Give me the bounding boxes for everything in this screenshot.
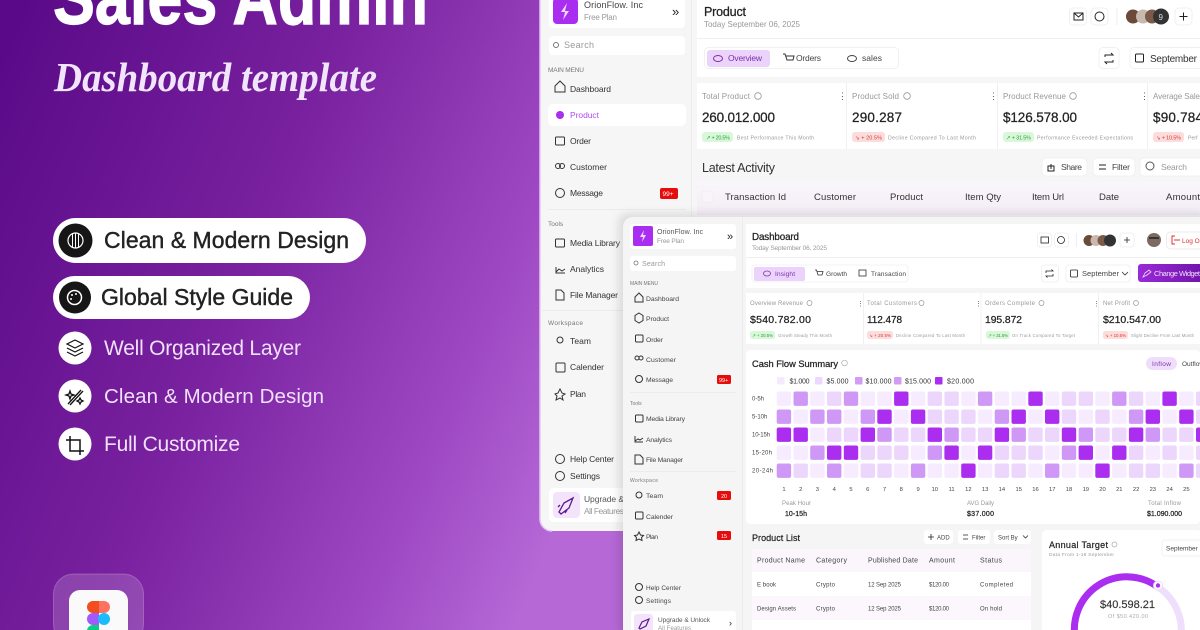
summary: peak hour bbox=[782, 501, 811, 518]
heatmap column labels: 18 bbox=[1066, 487, 1072, 493]
front sidebar menu: MAIN MENU bbox=[630, 281, 658, 287]
tabs: Growth bbox=[826, 271, 847, 278]
stat: orders complete: ⋮ bbox=[1093, 301, 1100, 308]
stat: average sale: Perf bbox=[1188, 136, 1198, 142]
heatmap row labels bbox=[752, 396, 773, 474]
sidebar menu: Tools bbox=[548, 221, 564, 228]
header actions bbox=[1038, 233, 1161, 247]
front sidebar menu: Help Center bbox=[646, 585, 682, 592]
stat: average sale bbox=[1153, 92, 1200, 142]
feature: full customize bbox=[58, 428, 240, 460]
dashboard header card: Today September 06, 2025 bbox=[752, 245, 827, 252]
stat: average sale: Average Sale bbox=[1153, 92, 1200, 101]
sidebar brand card: OrionFlow. Inc bbox=[584, 0, 644, 10]
front sidebar menu: Message bbox=[646, 377, 673, 384]
list table: Status bbox=[980, 558, 1002, 564]
stat: total product bbox=[702, 91, 847, 142]
stat: orders complete bbox=[985, 300, 1100, 339]
heatmap row labels: 20-24h bbox=[752, 468, 773, 474]
sidebar search: Search bbox=[564, 40, 594, 50]
stat: total customers: ⋮ bbox=[975, 301, 982, 308]
stat: net profit: ↘ + 10.5% bbox=[1105, 333, 1126, 338]
activity table header bbox=[697, 182, 1200, 215]
sidebar menu: Product bbox=[570, 110, 600, 120]
heatmap column labels: 17 bbox=[1049, 487, 1055, 493]
header actions bbox=[1070, 8, 1192, 25]
stat cards row (back) bbox=[697, 83, 1200, 149]
sidebar menu: Analytics bbox=[570, 264, 604, 274]
heatmap legend: $20.000 bbox=[947, 378, 974, 386]
stat: orders complete: On Track Compared To Target bbox=[1012, 333, 1076, 338]
heatmap column labels: 21 bbox=[1116, 487, 1123, 493]
tabs bbox=[752, 265, 908, 282]
stat: net profit: Net Profit bbox=[1103, 301, 1130, 307]
front sidebar menu: Calender bbox=[646, 514, 674, 521]
stat: orders complete: ↗ + 31.5% bbox=[988, 333, 1008, 338]
summary: peak hour: 10-15h bbox=[785, 511, 807, 518]
front sidebar menu bbox=[630, 281, 736, 605]
heatmap column labels: 5 bbox=[849, 487, 853, 493]
list table: 12 Sep 2025 bbox=[868, 606, 902, 612]
feature: well organized layer bbox=[58, 332, 301, 364]
sidebar brand card bbox=[549, 0, 685, 28]
stat: product revenue: Performance Exceeded Expectations bbox=[1037, 136, 1133, 142]
tabs: sales bbox=[862, 53, 882, 63]
activity table header: Date bbox=[1099, 192, 1119, 203]
sidebar menu: Media Library bbox=[570, 238, 621, 248]
inflow / outflow toggle bbox=[1146, 357, 1200, 370]
header actions: 9 bbox=[1158, 13, 1164, 22]
feature pill: clean and modern design: Clean & Modern Design bbox=[104, 227, 349, 253]
sidebar menu: 99+ bbox=[662, 191, 674, 198]
heatmap column labels: 25 bbox=[1183, 487, 1190, 493]
heatmap column labels: 14 bbox=[999, 487, 1006, 493]
sidebar menu: Message bbox=[570, 188, 603, 198]
heatmap column labels: 20 bbox=[1099, 487, 1106, 493]
sidebar menu: Help Center bbox=[570, 454, 614, 464]
month button bbox=[1130, 48, 1200, 68]
icon: palette bbox=[59, 282, 91, 314]
stat: product revenue bbox=[1003, 91, 1149, 142]
icon: figma logo bbox=[87, 601, 110, 630]
heatmap column labels: 16 bbox=[1032, 487, 1039, 493]
product header card: Product bbox=[704, 5, 747, 19]
dashboard header card bbox=[746, 224, 1200, 288]
month selector bbox=[1162, 540, 1200, 556]
month selector bbox=[1066, 265, 1130, 282]
heatmap column labels bbox=[782, 487, 1190, 493]
list table: Completed bbox=[980, 582, 1013, 588]
stat: orders complete: 195.872 bbox=[985, 315, 1022, 326]
panel: product list bbox=[746, 530, 1036, 630]
sidebar menu: Settings bbox=[570, 471, 600, 481]
log out button bbox=[1166, 232, 1200, 249]
heatmap column labels: 23 bbox=[1150, 487, 1156, 493]
gauge value: $40.598.21 bbox=[1100, 599, 1155, 611]
month selector: September bbox=[1082, 269, 1120, 278]
sidebar menu: Order bbox=[570, 136, 591, 146]
front sidebar menu: Order bbox=[646, 337, 664, 344]
heatmap column labels: 3 bbox=[816, 487, 819, 493]
stat: product revenue: ↗ + 31.5% bbox=[1006, 136, 1031, 142]
list table: Category bbox=[816, 558, 848, 564]
heatmap column labels: 10 bbox=[932, 487, 938, 493]
month button: September bbox=[1150, 54, 1198, 65]
heatmap column labels: 4 bbox=[833, 487, 837, 493]
change widget button: Change Widget bbox=[1154, 269, 1200, 278]
summary: avg daily: AVG Daily bbox=[967, 501, 994, 507]
stat: net profit: $210.547.00 bbox=[1103, 314, 1161, 326]
heatmap column labels: 12 bbox=[965, 487, 972, 493]
panel: product list: Product List bbox=[752, 533, 800, 543]
heatmap column labels: 22 bbox=[1133, 487, 1139, 493]
stat cards row (front) bbox=[746, 293, 1200, 344]
feature: clean and modern design bbox=[58, 380, 324, 412]
front sidebar menu: Team bbox=[646, 493, 663, 500]
stat: overview revenue: ↗ + 20.5% bbox=[752, 333, 773, 338]
heatmap column labels: 13 bbox=[982, 487, 988, 493]
table tools: Filter bbox=[1112, 162, 1130, 172]
sidebar menu: Workspace bbox=[548, 320, 583, 327]
change widget button bbox=[1138, 264, 1200, 282]
front upgrade card: Upgrade & Unlock bbox=[658, 617, 711, 624]
feature pill: clean and modern design bbox=[53, 218, 366, 263]
icon: crop bbox=[66, 436, 84, 455]
month selector: September bbox=[1166, 546, 1199, 552]
front sidebar brand: » bbox=[727, 231, 733, 243]
heatmap column labels: 19 bbox=[1083, 487, 1089, 493]
front sidebar brand: OrionFlow. Inc bbox=[657, 229, 704, 236]
list table: $120.00 bbox=[929, 606, 950, 612]
stat: total customers: Decline Compared To Last Month bbox=[896, 333, 966, 338]
stat: orders complete: Orders Complete bbox=[985, 301, 1036, 307]
feature: full customize: Full Customize bbox=[104, 433, 240, 456]
activity table header: Item Url bbox=[1032, 192, 1064, 203]
front sidebar menu: Customer bbox=[646, 357, 677, 364]
stat: product sold: Product Sold bbox=[852, 92, 899, 101]
product header card bbox=[697, 0, 1200, 77]
stat: total customers: 112.478 bbox=[867, 315, 902, 326]
list table: $120.00 bbox=[929, 582, 950, 588]
sidebar menu: Calender bbox=[570, 362, 604, 372]
list table: 12 Sep 2025 bbox=[868, 582, 902, 588]
heatmap column labels: 2 bbox=[799, 487, 802, 493]
stat: total customers bbox=[867, 300, 982, 339]
front sidebar menu: Product bbox=[646, 316, 669, 323]
gauge caption: Of $50.420.00 bbox=[1108, 614, 1148, 620]
front sidebar menu: Plan bbox=[646, 534, 658, 541]
sync button bbox=[1042, 265, 1058, 282]
table tools bbox=[1042, 158, 1200, 176]
heatmap row labels: 5-10h bbox=[752, 414, 767, 420]
stat: product sold: Decline Compared To Last Month bbox=[888, 136, 976, 142]
list actions: ADD bbox=[937, 536, 950, 542]
front sidebar brand bbox=[630, 224, 736, 249]
front sidebar brand: Free Plan bbox=[657, 238, 684, 245]
sidebar menu: Dashboard bbox=[570, 84, 611, 94]
front sidebar menu: 99+ bbox=[719, 378, 728, 384]
activity table header: Product bbox=[890, 192, 923, 203]
list table: Product Name bbox=[757, 558, 805, 564]
list table: Published Date bbox=[868, 558, 918, 564]
table tools: Share bbox=[1061, 162, 1082, 172]
sidebar menu: MAIN MENU bbox=[548, 67, 584, 74]
stat: overview revenue: ⋮ bbox=[857, 301, 864, 308]
sidebar upgrade card: Upgrade & bbox=[584, 494, 624, 504]
stat: total product: ⋮ bbox=[838, 91, 847, 101]
feature: well organized layer: Well Organized Layer bbox=[104, 337, 301, 360]
stat: product sold bbox=[852, 91, 998, 142]
summary: avg daily: $37.000 bbox=[967, 511, 994, 518]
heatmap legend: $10.000 bbox=[866, 378, 892, 386]
list actions bbox=[924, 530, 1031, 544]
stat: overview revenue bbox=[750, 300, 864, 339]
heatmap legend: $5.000 bbox=[826, 378, 849, 386]
stat: product revenue: $126.578.00 bbox=[1003, 110, 1077, 125]
summary: avg daily bbox=[967, 501, 994, 518]
table tools: Search bbox=[1161, 162, 1187, 172]
activity table header: Transaction Id bbox=[725, 192, 786, 203]
icon: contrast circle bbox=[58, 224, 92, 258]
stat: overview revenue: $540.782.00 bbox=[750, 314, 811, 326]
stat: total product: Total Product bbox=[702, 92, 751, 101]
stat: net profit: Slight Decline From Last Month bbox=[1131, 333, 1195, 338]
heatmap column labels: 1 bbox=[782, 487, 786, 493]
stat: total customers: ↘ + 20.5% bbox=[869, 333, 891, 338]
summary: total inflow: $1.090.000 bbox=[1147, 511, 1182, 518]
summary: total inflow: Total Inflow bbox=[1148, 501, 1182, 507]
subtitle: Dashboard template bbox=[53, 54, 377, 100]
icon: layers bbox=[67, 340, 83, 356]
sidebar menu: Team bbox=[570, 336, 591, 346]
front upgrade card bbox=[631, 611, 736, 630]
summary: total inflow bbox=[1147, 501, 1182, 518]
figma badge bbox=[54, 574, 144, 630]
list table: Amount bbox=[929, 558, 955, 564]
front sidebar menu: Settings bbox=[646, 598, 672, 605]
stat: net profit bbox=[1103, 300, 1195, 339]
list actions: Sort By bbox=[998, 536, 1018, 542]
stat: total customers: Total Customers bbox=[867, 301, 917, 307]
stat: product sold: ⋮ bbox=[989, 91, 998, 101]
summary: peak hour: Peak Hour bbox=[782, 501, 811, 507]
icon: magic wand bbox=[66, 390, 83, 405]
heatmap column labels: 9 bbox=[916, 487, 920, 493]
feature pill: global style guide: Global Style Guide bbox=[101, 284, 293, 310]
front sidebar menu: Workspace bbox=[630, 478, 658, 484]
stat: total product: ↗ + 20.5% bbox=[706, 136, 730, 142]
tabs: Insight bbox=[775, 271, 795, 278]
list actions: Filter bbox=[972, 536, 985, 542]
sidebar menu: Plan bbox=[570, 389, 586, 399]
gauge bbox=[1074, 577, 1181, 630]
tabs: Overview bbox=[728, 53, 763, 63]
panel: product dashboard (back) bbox=[540, 0, 1200, 531]
front sidebar menu: Analytics bbox=[646, 437, 673, 444]
front sidebar menu: File Manager bbox=[646, 457, 684, 464]
front sidebar search bbox=[630, 256, 736, 271]
front sidebar menu: 15 bbox=[721, 534, 727, 540]
list table: E book bbox=[757, 582, 777, 588]
panel: annual target bbox=[1042, 530, 1200, 630]
stat: overview revenue: Overview Revenue bbox=[750, 301, 804, 307]
product header card: Today September 06, 2025 bbox=[704, 20, 801, 29]
dashboard header card: Dashboard bbox=[752, 232, 799, 243]
feature: clean and modern design: Clean & Modern Design bbox=[104, 385, 324, 408]
tabs: Orders bbox=[796, 53, 821, 63]
stat: product sold: 290.287 bbox=[852, 110, 902, 125]
inflow / outflow toggle: Inflow bbox=[1152, 361, 1171, 368]
heatmap column labels: 7 bbox=[883, 487, 886, 493]
sidebar upgrade card: All Features bbox=[584, 506, 624, 516]
front sidebar menu: Tools bbox=[630, 401, 642, 407]
sidebar menu bbox=[540, 67, 690, 481]
heatmap column labels: 24 bbox=[1166, 487, 1174, 493]
sync button bbox=[1099, 48, 1119, 68]
heatmap row labels: 0-5h bbox=[752, 396, 764, 402]
heatmap column labels: 8 bbox=[900, 487, 903, 493]
panel: cash flow summary: Cash Flow Summary bbox=[752, 359, 838, 369]
feature pill: global style guide bbox=[53, 276, 310, 319]
front sidebar search: Search bbox=[642, 261, 665, 268]
stat: overview revenue: Growth Steady This Month bbox=[778, 333, 833, 338]
heatmap grid bbox=[777, 392, 1200, 478]
activity table header: Amount bbox=[1166, 192, 1200, 203]
shadow under front panel bbox=[618, 213, 1200, 630]
sidebar search bbox=[549, 36, 685, 55]
list table: Design Assets bbox=[757, 606, 796, 612]
stat: product revenue: Product Revenue bbox=[1003, 92, 1067, 101]
front sidebar menu: 20 bbox=[721, 494, 727, 500]
stat: product sold: ↘ + 20.5% bbox=[855, 136, 882, 142]
heatmap legend: $15.000 bbox=[905, 378, 931, 386]
sidebar menu: Customer bbox=[570, 162, 607, 172]
stat: product revenue: ⋮ bbox=[1140, 91, 1149, 101]
tabs: Transaction bbox=[871, 271, 906, 278]
stat: total product: Best Performance This Month bbox=[737, 136, 814, 142]
heatmap row labels: 15-20h bbox=[752, 450, 772, 456]
heatmap row labels: 10-15h bbox=[752, 432, 770, 438]
sidebar brand card: » bbox=[672, 4, 679, 19]
activity table header: Customer bbox=[814, 192, 856, 203]
heatmap legend: $1.000 bbox=[790, 378, 810, 386]
heatmap legend bbox=[777, 377, 974, 386]
panel: annual target: Annual Target bbox=[1049, 540, 1108, 550]
activity table header: Item Qty bbox=[965, 192, 1001, 203]
heatmap column labels: 11 bbox=[949, 487, 955, 493]
latest activity heading: Latest Activity bbox=[702, 161, 776, 175]
heatmap column labels: 6 bbox=[866, 487, 869, 493]
tabs bbox=[704, 48, 898, 68]
list table: Crypto bbox=[816, 606, 836, 612]
front sidebar menu: Dashboard bbox=[646, 296, 679, 303]
panel: main dashboard (front) bbox=[623, 217, 1200, 630]
list table: Crypto bbox=[816, 582, 836, 588]
list table bbox=[752, 549, 1031, 630]
stat: average sale: ↘ + 10.5% bbox=[1156, 136, 1181, 142]
panel: cash flow summary bbox=[746, 350, 1200, 524]
sidebar brand card: Free Plan bbox=[584, 13, 617, 22]
sidebar upgrade card bbox=[549, 488, 649, 522]
sidebar menu: File Manager bbox=[570, 290, 618, 300]
front sidebar menu: Media Library bbox=[646, 416, 686, 423]
panel: annual target: Data From 1-18 September bbox=[1049, 552, 1114, 558]
front upgrade card: › bbox=[729, 618, 732, 628]
stat: total product: 260.012.000 bbox=[702, 110, 775, 125]
list table: On hold bbox=[980, 606, 1002, 612]
heatmap column labels: 15 bbox=[1015, 487, 1022, 493]
